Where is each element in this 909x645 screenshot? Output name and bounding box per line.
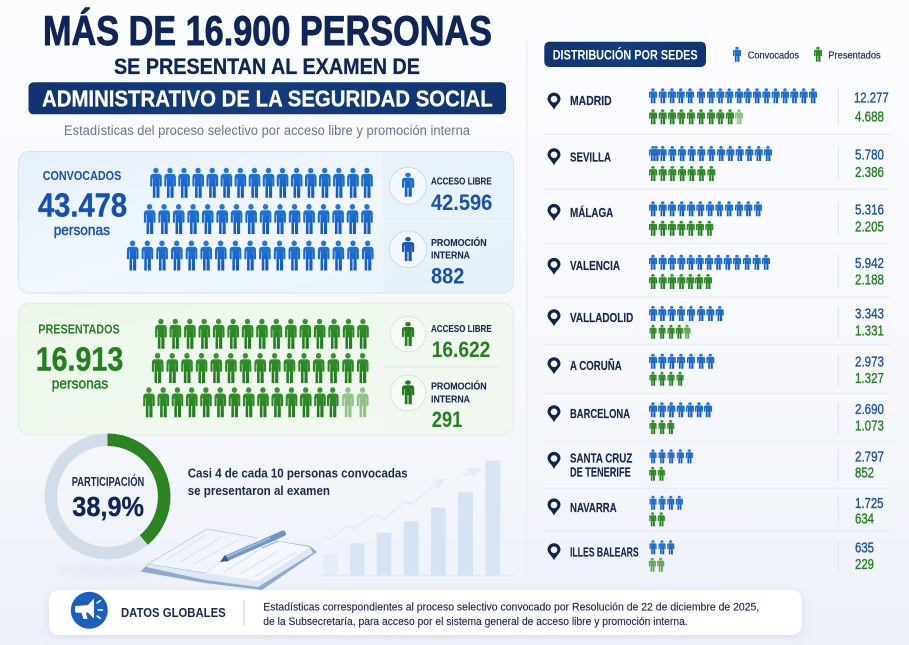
acceso libre convocados [390,167,492,215]
panel heading: distribución por sedes [544,42,706,67]
acceso libre convocados: 42.596 [431,190,492,215]
pictogram: presentados [143,319,369,417]
footer: datos globales: de la Subsecretaría, para acceso por el sistema general de acceso libre y promoción interna. [263,616,688,628]
row: Sevilla: 2.386 [855,165,884,181]
promocion interna presentados: PROMOCIÓN [431,380,487,393]
convocados total: CONVOCADOS [43,168,122,183]
row: Madrid: 12.277 [854,90,889,106]
acceso libre presentados: 16.622 [432,337,490,362]
row: A Coruña: A CORUÑA [570,358,622,373]
row: Málaga: MÁLAGA [570,205,613,220]
promocion interna convocados [390,231,487,288]
decorative bar chart with arrow [320,461,513,576]
footer: datos globales: DATOS GLOBALES [121,605,226,620]
row: Valencia: 2.188 [855,273,884,289]
pictogram: convocados [127,168,374,270]
row: Madrid: 4.688 [855,110,884,126]
acceso libre presentados: ACCESO LIBRE [431,324,492,335]
row: Valladolid: VALLADOLID [570,311,633,325]
promocion interna convocados: 882 [431,263,464,288]
footer: datos globales [49,590,802,635]
row: Santa Cruz de Tenerife: DE TENERIFE [570,466,631,480]
presentados total: PRESENTADOS [38,321,120,336]
presentados total [36,321,123,393]
banner: ADMINISTRATIVO DE LA SEGURIDAD SOCIAL [42,86,493,112]
row: Barcelona: BARCELONA [570,407,630,421]
row: Sevilla: SEVILLA [570,150,611,164]
illustration: open notebook and pen [140,529,317,590]
acceso libre convocados: ACCESO LIBRE [431,176,492,187]
row: Málaga: 2.205 [855,220,884,236]
presentados total: personas [52,377,108,393]
secondary headline: SE PRESENTAN AL EXAMEN DE [114,54,420,79]
panel: convocados [18,152,514,293]
row: Navarra [548,496,884,527]
row: Valladolid [548,306,884,339]
footer: datos globales: Estadísticas correspondientes al proceso selectivo convocado por Resolución de 22 de diciembre de 2025, [263,602,759,614]
row: Madrid [548,88,889,126]
promocion interna convocados: PROMOCIÓN [431,236,487,249]
participation donut: 38,9% [72,491,144,522]
row: Valencia: VALENCIA [570,259,620,273]
legend: Presentados [828,49,881,61]
row: Sevilla [548,146,884,181]
row: Santa Cruz de Tenerife: SANTA CRUZ [570,451,633,465]
legend: Convocados [748,49,799,61]
pen [220,534,283,562]
row: Madrid: MADRID [570,94,612,108]
row: Santa Cruz de Tenerife: 852 [855,466,874,482]
convocados total: 43.478 [38,188,127,225]
row: Valencia [548,255,884,289]
acceso libre presentados [390,316,492,362]
participation note [188,466,408,498]
participation note: Casi 4 de cada 10 personas convocadas [188,466,408,480]
row: Valencia: 5.942 [855,256,884,272]
subtitle: Estadísticas del proceso selectivo por acceso libre y promoción interna [64,123,470,138]
presentados total: 16.913 [36,342,123,379]
row: Barcelona: 2.690 [855,402,884,418]
promocion interna presentados: INTERNA [431,394,470,405]
row: Illes Balears [548,540,874,573]
row: Málaga: 5.316 [855,203,884,219]
row: Navarra: 1.725 [855,496,884,512]
title block [28,7,506,138]
panel heading: distribución por sedes: DISTRIBUCIÓN POR SEDES [553,45,698,62]
row: A Coruña: 1.327 [855,371,884,387]
row: Barcelona [548,402,884,435]
promocion interna convocados: INTERNA [431,251,470,262]
row: Illes Balears: 229 [855,557,874,573]
convocados total: personas [54,223,110,239]
icon: megaphone [71,592,108,629]
participation donut [51,440,164,576]
participation donut: PARTICIPACIÓN [72,474,144,489]
promocion interna presentados [390,375,487,432]
column divider [526,40,528,576]
row: Santa Cruz de Tenerife: 2.797 [855,450,884,466]
promocion interna presentados: 291 [432,407,462,432]
participation note: se presentaron al examen [188,484,330,498]
row: Sevilla: 5.780 [855,147,884,163]
row: Málaga [548,201,884,236]
row: Barcelona: 1.073 [855,419,884,435]
row: Valladolid: 1.331 [855,323,884,339]
row: Valladolid: 3.343 [855,307,884,323]
row: A Coruña: 2.973 [855,355,884,371]
row: A Coruña [548,354,884,387]
row dividers [544,134,890,531]
main headline: MÁS DE 16.900 PERSONAS [43,7,492,54]
legend [733,47,881,62]
row: Navarra: NAVARRA [570,501,617,515]
panel: presentados [18,303,514,435]
row: Navarra: 634 [855,511,874,527]
row: Illes Balears: 635 [855,541,874,557]
convocados total [38,168,127,239]
row: Illes Balears: ILLES BALEARS [570,545,639,559]
row: Santa Cruz de Tenerife [548,449,884,482]
